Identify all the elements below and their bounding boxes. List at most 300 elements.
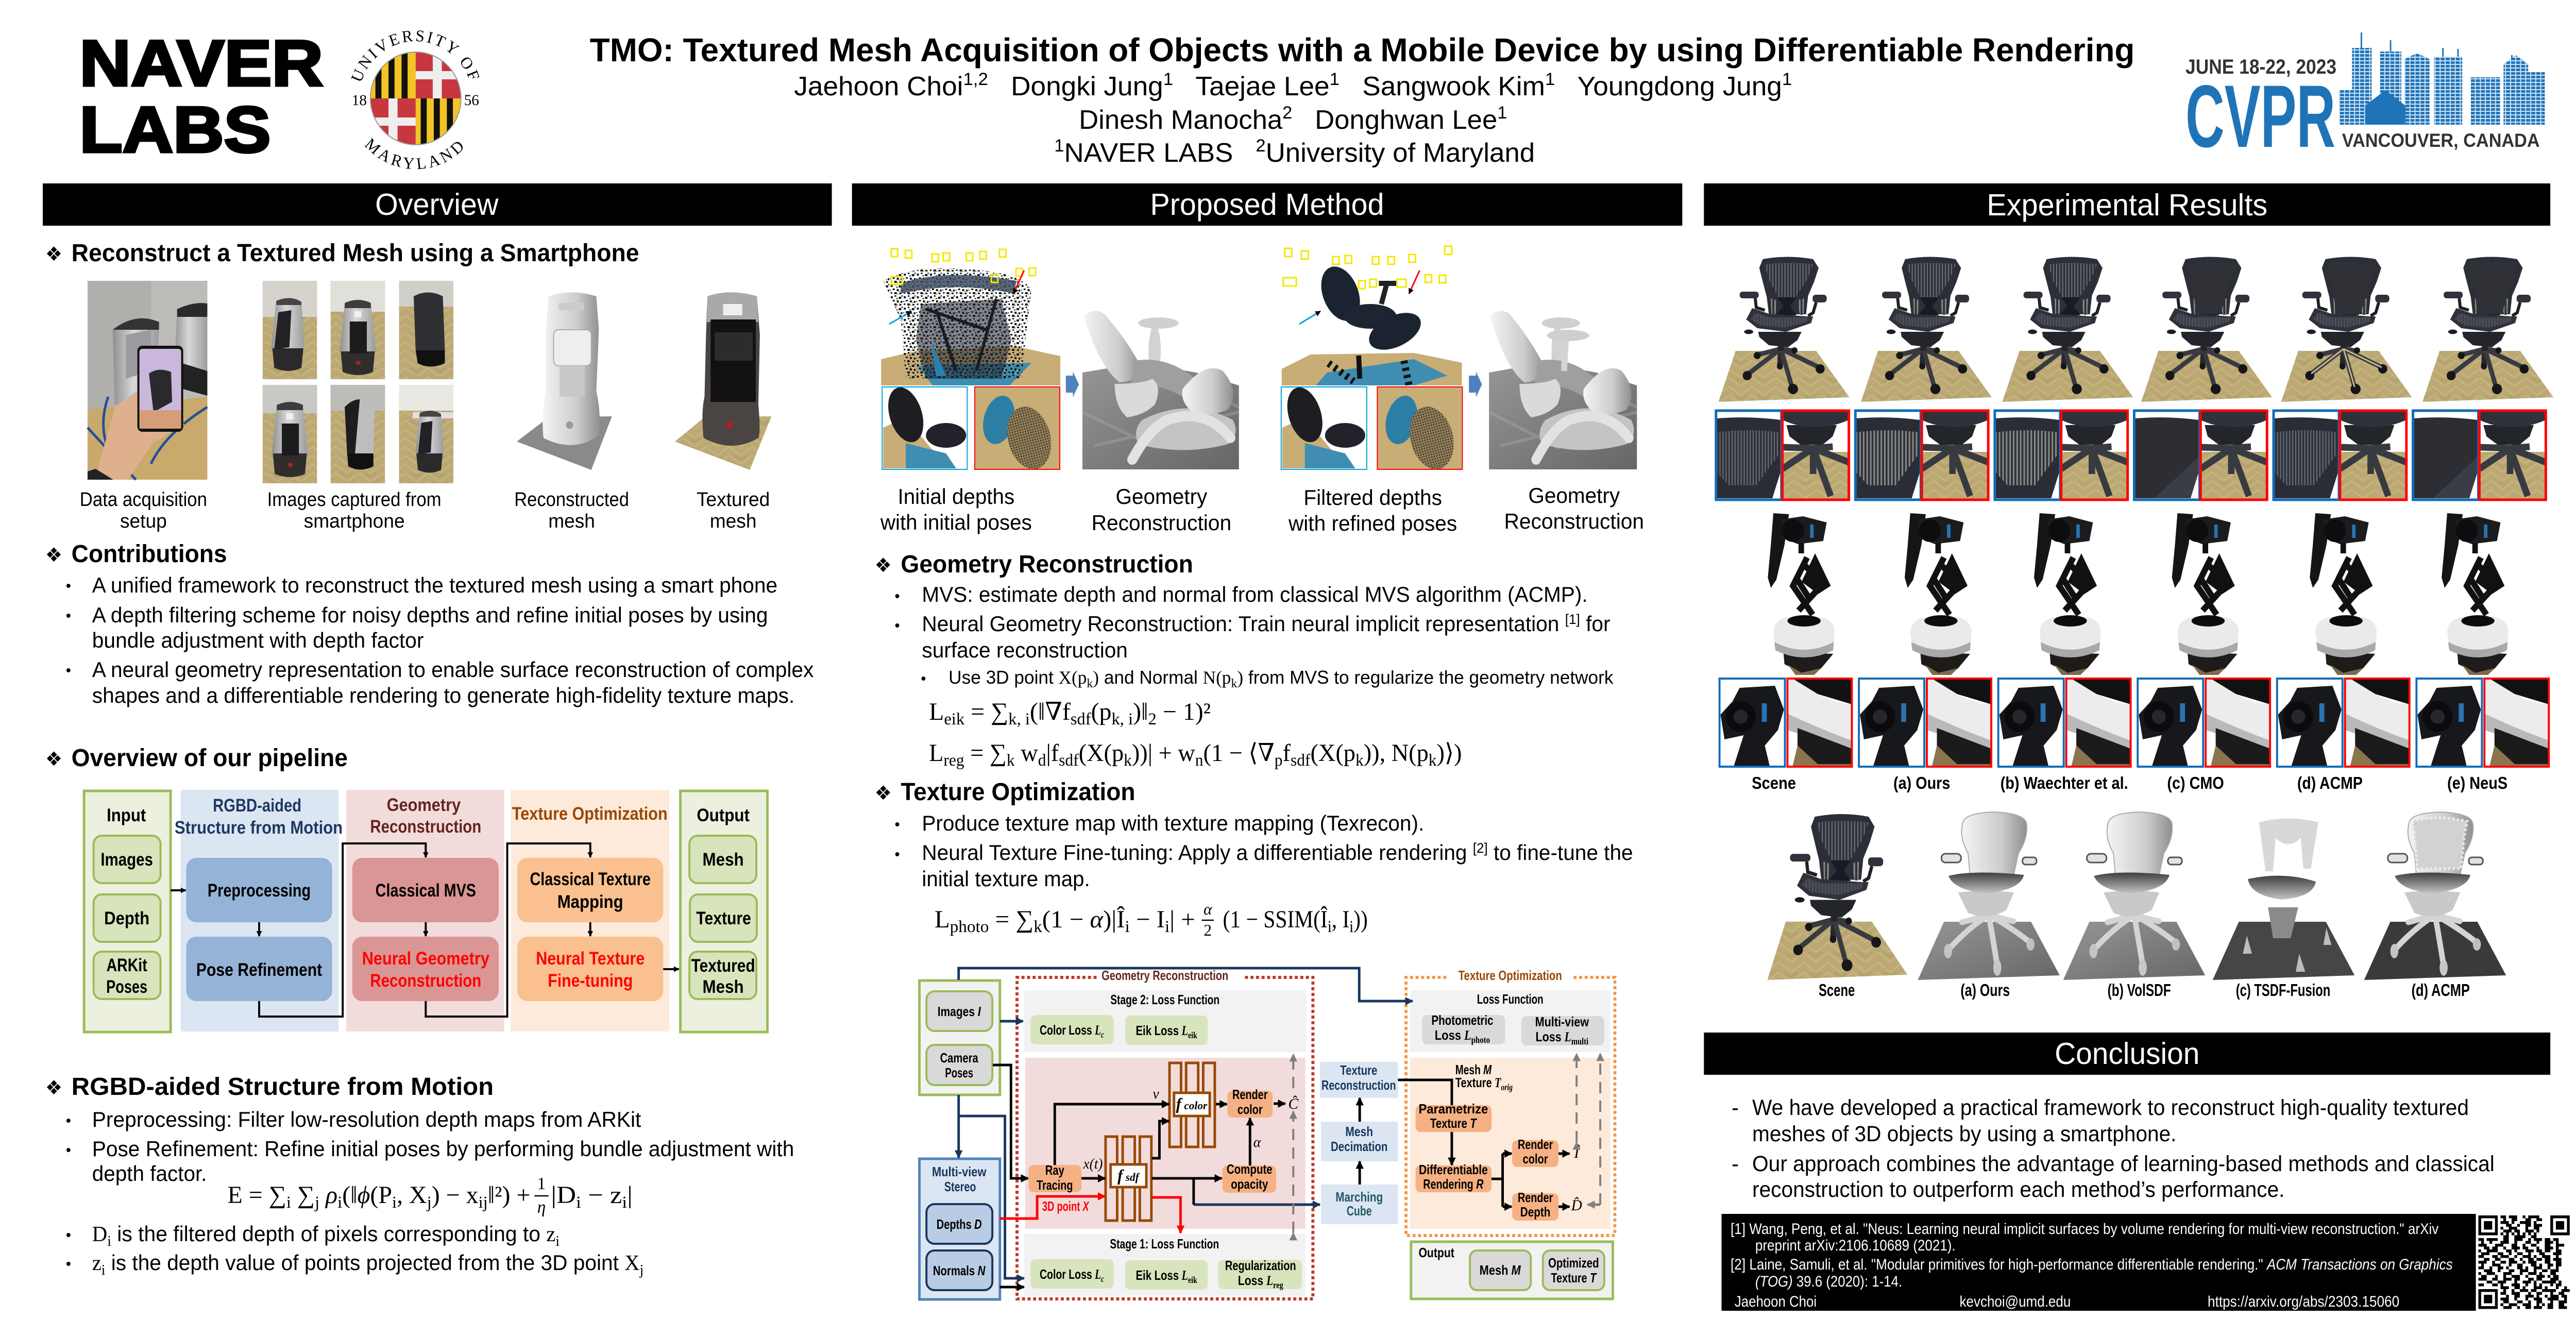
equation: regularization loss: (X(p (1079, 740, 1124, 767)
QR code (2479, 1215, 2570, 1309)
panel: texture optimization steps: Î (1573, 1144, 1580, 1161)
equation: regularization loss: )⟩) (1437, 740, 1462, 767)
equation: eikonal loss: L (929, 699, 944, 725)
header: Overview (43, 183, 832, 226)
row: textured chair comparison (1719, 257, 2553, 402)
panel: texture loss function: multi (1571, 1036, 1588, 1046)
equation: bundle adjustment energy: i (622, 1193, 627, 1211)
text block: geometry reconstruction list: MVS: estimate depth and normal from classical MVS algorithm (ACMP). (922, 582, 1588, 606)
logo: CVPR 2023 Vancouver: JUNE 18-22, 2023 (2185, 56, 2336, 78)
render: textured mesh (675, 293, 771, 470)
equation: eikonal loss: = ∑ (964, 699, 1008, 725)
header: Experimental Results (1704, 183, 2550, 226)
panel: multi-view stereo: Depths D (937, 1217, 982, 1232)
block: marching cube: Cube (1347, 1204, 1372, 1219)
panel: texture optimization steps: Mesh M (1455, 1063, 1492, 1077)
photo: data acquisition setup (88, 281, 207, 480)
panel: texture loss function: Multi-view (1535, 1015, 1589, 1029)
text block: RGBD-aided SfM list: Preprocessing: Filter low-resolution depth maps from ARKit (92, 1107, 641, 1131)
text block: texture optimization list: initial texture map. (922, 867, 1090, 891)
arrow: blue step 2 (1469, 371, 1482, 397)
equation: regularization loss: sdf (1291, 751, 1311, 769)
equation: eikonal loss: sdf (1071, 709, 1091, 728)
text block: texture optimization list: Produce texture map with texture mapping (Texrecon). (922, 811, 1424, 835)
panel: stage 2 loss: Eik Loss L (1136, 1023, 1190, 1038)
text block: geometry reconstruction list: k (1231, 677, 1238, 690)
panel: output: Mesh (703, 850, 744, 870)
equation: photometric loss: , I (1332, 906, 1349, 933)
equation: bundle adjustment energy: ‖²) + (488, 1182, 530, 1209)
authors: Donghwan Lee (1292, 104, 1497, 134)
authors: Taejae Lee (1173, 71, 1330, 101)
block: mesh decimation: Mesh (1345, 1125, 1373, 1139)
panel: stage 2 loss: c (1101, 1029, 1104, 1040)
image: initial depths point cloud (881, 249, 1060, 475)
text block: conclusion: reconstruction to outperform each method’s performance. (1752, 1178, 2284, 1202)
captions: proposed method images: with refined poses (1288, 511, 1457, 535)
block: marching cube: Marching (1335, 1190, 1383, 1205)
panel: Overview (43, 183, 832, 1278)
authors: 1 (1782, 70, 1792, 89)
authors: 1 (1054, 137, 1064, 156)
equation: regularization loss: sdf (1059, 751, 1079, 769)
authors: 1 (1330, 70, 1340, 89)
header: Experimental Results: Experimental Results (1987, 188, 2267, 222)
equation: photometric loss: i (1328, 917, 1332, 936)
captions: proposed method images: Geometry (1115, 484, 1207, 509)
row: geometry comparison chairs (1767, 812, 2506, 980)
block: texture reconstruction: Texture (1340, 1063, 1377, 1078)
equation: bundle adjustment energy: |D (551, 1182, 573, 1209)
equation: bundle adjustment energy: , X (397, 1182, 427, 1209)
equation: eikonal loss: eik (944, 709, 965, 728)
panel: output mesh and texture: Texture T (1551, 1271, 1597, 1286)
captions: overview images: Images captured from (267, 488, 442, 510)
panel: Proposed Method (852, 183, 1682, 1299)
equation: bundle adjustment energy: (‖ (342, 1182, 358, 1209)
panel: input: Images (100, 850, 153, 870)
authors (794, 70, 1792, 167)
panel: output: Mesh (703, 977, 744, 997)
equation: photometric loss: )) (1353, 906, 1368, 933)
panel: networks (1025, 1058, 1306, 1229)
row: robot arm comparison (1768, 513, 2509, 675)
heading: Geometry Reconstruction: ❖ (875, 554, 892, 577)
text block: conclusion: meshes of 3D objects by using a smartphone. (1752, 1122, 2176, 1146)
heading: Contributions: ❖ (45, 544, 62, 566)
panel: networks: opacity (1231, 1177, 1268, 1192)
panel: stage 1 loss: eik (1188, 1275, 1197, 1285)
text block: geometry reconstruction list: from MVS to regularize the geometry network (1248, 667, 1613, 688)
equation: photometric loss: (1 − SSIM(Î (1223, 906, 1341, 933)
panel: stage 1 loss: c (1101, 1274, 1104, 1284)
equation: regularization loss: k (1124, 751, 1132, 769)
equation: regularization loss: |f (1046, 740, 1059, 767)
equation: regularization loss: )), N(p (1364, 740, 1429, 767)
captions: overview images (80, 488, 770, 532)
text block: texture optimization list: [2] (1473, 840, 1488, 856)
panel: stage 1 loss: Loss L (1238, 1273, 1275, 1288)
equation: photometric loss: L (935, 906, 949, 933)
logo: University of Maryland seal: 56 (464, 92, 479, 109)
logo: NAVER LABS: LABS (79, 94, 270, 166)
heading: Geometry Reconstruction: Geometry Reconstruction (901, 551, 1193, 578)
authors: Dinesh Manocha (1079, 104, 1275, 134)
frame: texture optimization: Texture Optimization (1459, 969, 1562, 983)
authors: Sangwook Kim (1340, 71, 1545, 101)
heading: RGBD-aided Structure from Motion: RGBD-aided Structure from Motion (72, 1073, 494, 1101)
captions: proposed method images: Reconstruction (1092, 511, 1231, 535)
network: f color (1170, 1063, 1215, 1147)
panel: RGBD-aided structure from motion: Pose Refinement (196, 960, 323, 980)
labels: geometry comparison methods: (b) VolSDF (2108, 980, 2171, 1000)
equation: photometric loss: = ∑ (989, 906, 1033, 933)
heading: Reconstruct a Textured Mesh: ❖ (45, 243, 62, 265)
authors: 1,2 (963, 70, 988, 89)
text block: RGBD-aided SfM list: depth factor. (92, 1161, 207, 1186)
panel: texture optimization steps: D̂ (1571, 1197, 1582, 1214)
equation: bundle adjustment energy: j (427, 1193, 432, 1211)
authors: Dongki Jung (988, 71, 1163, 101)
equation: regularization loss: f (1283, 740, 1291, 767)
equation: bundle adjustment energy: ρ (319, 1182, 337, 1209)
captions: proposed method images: Reconstruction (1504, 509, 1644, 533)
text block: RGBD-aided SfM list: is the depth value of points projected from the 3D point (105, 1250, 624, 1275)
text block: RGBD-aided SfM list (66, 1107, 794, 1278)
panel: texture loss function (1410, 990, 1611, 1052)
equation: regularization loss: w (1015, 740, 1038, 767)
equation: bundle adjustment energy: i (337, 1193, 342, 1211)
text block: RGBD-aided SfM list: i (107, 1233, 111, 1249)
arrow: blue step 1 (1066, 371, 1079, 397)
panel: stage 2 loss (1024, 990, 1307, 1052)
labels: texture comparison methods: (c) CMO (2167, 773, 2224, 792)
equation: regularization loss: = ∑ (964, 740, 1007, 767)
authors: Youngdong Jung (1555, 71, 1782, 101)
labels: geometry comparison methods: (c) TSDF-Fusion (2236, 980, 2330, 1000)
authors: 2 (1282, 104, 1292, 123)
panel: networks: Ray (1045, 1163, 1064, 1178)
heading: Overview of our pipeline: ❖ (45, 748, 62, 770)
panel: texture optimization steps: Render (1518, 1138, 1553, 1152)
equation: eikonal loss: k, i (1008, 709, 1030, 728)
panel: output (681, 791, 768, 1032)
labels: texture comparison methods: (d) ACMP (2297, 773, 2363, 792)
equation: regularization loss: ))| + w (1132, 740, 1195, 767)
equation: eikonal loss: 2 (1148, 709, 1157, 728)
panel: output mesh and texture (1411, 1242, 1613, 1299)
panel: texture optimization (511, 790, 669, 1031)
panel: output mesh and texture: Output (1418, 1246, 1454, 1260)
panel: input: ARKit (107, 956, 147, 975)
authors: 1 (1163, 70, 1173, 89)
frame: geometry reconstruction (1017, 969, 1313, 1299)
captions: overview images: mesh (548, 510, 595, 532)
equation: regularization loss: L (929, 740, 944, 767)
panel: stage 1 loss: Color Loss L (1040, 1267, 1108, 1282)
panel: texture optimization steps: Texture T (1455, 1075, 1503, 1090)
text block: RGBD-aided SfM list: is the filtered depth of pixels corresponding to (111, 1222, 546, 1246)
equation: photometric loss: α)|Î (1090, 906, 1124, 933)
captions: overview images: Reconstructed (514, 488, 629, 510)
flowchart: pipeline overview (84, 790, 768, 1032)
panel: networks: Tracing (1037, 1178, 1073, 1193)
logo: CVPR 2023 Vancouver (2185, 32, 2545, 166)
panel: output mesh and texture: Optimized (1548, 1256, 1599, 1271)
text block: texture optimization list: to fine-tune the (1488, 840, 1633, 865)
row: chair detail crops (1716, 411, 2546, 500)
text block: geometry reconstruction list: [1] (1565, 612, 1580, 627)
panel: RGBD-aided structure from motion: Structure from Motion (175, 818, 343, 838)
labels: geometry comparison methods: Scene (1819, 980, 1855, 1000)
text block: RGBD-aided SfM list: D (92, 1222, 107, 1246)
logo: University of Maryland seal: UNIVERSITY OF (351, 30, 480, 81)
panel: texture optimization steps: orig (1501, 1082, 1513, 1092)
text block: geometry reconstruction list: Use 3D point X(p (948, 667, 1087, 688)
panel: texture optimization steps: Rendering R (1423, 1177, 1484, 1192)
panel: texture optimization: Texture Optimization (512, 804, 668, 824)
text block: contributions list: shapes and a differentiable rendering to generate high-fidelity texture maps. (92, 683, 794, 707)
equation: eikonal loss: (p (1091, 699, 1111, 725)
render: first geometry reconstruction (1082, 311, 1239, 469)
text block: contributions list: A depth filtering scheme for noisy depths and refine initial poses by using (92, 603, 768, 627)
captions: overview images: mesh (710, 510, 757, 532)
text block: contributions list (66, 573, 814, 707)
captions: overview images: smartphone (304, 510, 405, 532)
panel: texture optimization: Mapping (557, 892, 623, 912)
panel: input: Input (107, 806, 146, 825)
block: texture reconstruction: Reconstruction (1321, 1078, 1396, 1093)
text block: texture optimization list: Neural Texture Fine-tuning: Apply a differentiable rendering (922, 840, 1473, 865)
panel: RGBD-aided structure from motion: RGBD-aided (213, 796, 301, 816)
panel: references and contact: [1] Wang, Peng, et al. "Neus: Learning neural implicit surfaces by volume rendering for multi-view reconstruction." arXiv (1731, 1221, 2439, 1238)
text block: conclusion: - (1732, 1096, 1739, 1120)
authors: NAVER LABS (1064, 137, 1256, 167)
panel: texture optimization steps: Differentiable (1419, 1163, 1488, 1177)
equation: photometric loss: photo (950, 917, 989, 936)
panel: texture loss function: photo (1471, 1035, 1490, 1045)
panel: texture loss function: Photometric (1431, 1013, 1494, 1028)
equation: bundle adjustment energy: ∑ (291, 1182, 315, 1209)
text block: geometry reconstruction list: ) (1237, 667, 1243, 688)
equation: photometric loss: i (1165, 917, 1170, 936)
labels: geometry comparison methods: (a) Ours (1960, 980, 2010, 1000)
panel: RGBD-aided structure from motion: Preprocessing (208, 881, 311, 901)
row: robot arm detail crops (1720, 679, 2549, 767)
equation: bundle adjustment energy: 1 (537, 1174, 546, 1193)
authors: 1 (1545, 70, 1555, 89)
panel: texture loss function: Loss L (1536, 1029, 1572, 1044)
text block: geometry reconstruction list: and Normal N(p (1104, 667, 1231, 688)
heading: Reconstruct a Textured Mesh: Reconstruct a Textured Mesh using a Smartphone (72, 240, 639, 267)
panel: texture optimization: Fine-tuning (548, 971, 633, 991)
panel: texture optimization steps: Render (1518, 1191, 1553, 1205)
equation: eikonal loss: − 1)² (1157, 699, 1211, 725)
text block: geometry reconstruction list: Neural Geometry Reconstruction: Train neural implicit representation (922, 612, 1564, 636)
captions: proposed method images: Filtered depths (1303, 485, 1442, 510)
network: f sdf (1106, 1137, 1151, 1221)
panel: geometry reconstruction: Reconstruction (370, 971, 481, 991)
equation: bundle adjustment energy: j (314, 1193, 319, 1211)
panel: stage 1 loss: Eik Loss L (1136, 1268, 1190, 1283)
captions: proposed method images (880, 483, 1644, 535)
text block: RGBD-aided SfM list: z (546, 1222, 555, 1246)
text block: texture optimization list (895, 811, 1633, 891)
equation: eikonal loss: (‖∇f (1030, 699, 1071, 725)
logo: University of Maryland seal (351, 30, 480, 169)
panel: multi-view stereo: Normals N (933, 1264, 986, 1278)
equation: regularization loss: k (1429, 751, 1437, 769)
header: Overview: Overview (375, 188, 499, 222)
panel: references and contact: preprint arXiv:2106.10689 (2021). (1755, 1237, 1956, 1254)
authors: 2 (1256, 137, 1266, 156)
equation: photometric loss (935, 900, 1368, 939)
panel: texture loss function: Loss Function (1477, 992, 1544, 1007)
labels: geometry comparison methods (1819, 980, 2470, 1000)
equation: bundle adjustment energy: | (627, 1182, 633, 1209)
panel: geometry reconstruction: Geometry (387, 796, 461, 815)
title: TMO: Textured Mesh Acquisition of Objects with a Mobile Device by using Differentiable Rendering (590, 32, 2134, 69)
logo: CVPR 2023 Vancouver: CVPR (2185, 67, 2335, 166)
equation: regularization loss: (X(p (1311, 740, 1355, 767)
text block: contributions list: A unified framework to reconstruct the textured mesh using a smart phone (92, 573, 777, 597)
panel: Experimental Results (1704, 183, 2570, 1311)
panel: input: Depth (104, 909, 149, 928)
text block: RGBD-aided SfM list: X (624, 1251, 640, 1275)
panel: references and contact: Jaehoon Choi (1735, 1293, 1817, 1310)
text block: conclusion (1732, 1096, 2495, 1202)
authors: 1 (1497, 104, 1507, 123)
panel: geometry reconstruction (346, 790, 504, 1031)
equation: bundle adjustment energy: ϕ(P (358, 1182, 392, 1209)
equation: bundle adjustment energy: ij (479, 1193, 488, 1211)
text block: RGBD-aided SfM list: i (101, 1262, 106, 1278)
equation: regularization loss: reg (943, 751, 964, 769)
equation: regularization loss: p (1275, 751, 1283, 769)
text block: conclusion: We have developed a practical framework to reconstruct high-quality textured (1752, 1096, 2469, 1120)
logo: University of Maryland seal: MARYLAND (364, 138, 463, 169)
authors: Jaehoon Choi (794, 71, 956, 101)
header: Conclusion: Conclusion (2055, 1037, 2199, 1071)
panel: RGBD-aided structure from motion (175, 790, 343, 1031)
panel: networks: x(t) (1083, 1156, 1103, 1172)
panel: output: Output (697, 806, 750, 825)
panel: input images and poses (920, 980, 1000, 1095)
frame: texture optimization (1406, 969, 1615, 1236)
panel: networks: color (1238, 1103, 1263, 1117)
panel: networks: Ĉ (1288, 1095, 1299, 1112)
logo: CVPR 2023 Vancouver: VANCOUVER, CANADA (2342, 130, 2540, 151)
panel: multi-view stereo: Stereo (944, 1180, 976, 1194)
text block: RGBD-aided SfM list: Pose Refinement: Refine initial poses by performing bundle adjustment with (92, 1137, 794, 1161)
image grid: images captured from smartphone (263, 281, 453, 483)
equation: photometric loss: − I (1130, 906, 1165, 933)
panel: stage 2 loss: Stage 2: Loss Function (1110, 993, 1219, 1007)
text block: RGBD-aided SfM list: z (92, 1251, 101, 1275)
heading: Contributions: Contributions (72, 540, 227, 568)
panel: multi-view stereo (920, 1159, 1000, 1299)
text block: conclusion: - (1732, 1152, 1739, 1176)
equation: photometric loss: | + (1170, 906, 1195, 933)
equation: bundle adjustment energy: − z (581, 1182, 622, 1209)
panel: output mesh and texture: Mesh M (1480, 1263, 1521, 1278)
text block: geometry reconstruction list: for (1580, 612, 1611, 636)
equation: regularization loss: (1 − ⟨∇ (1204, 740, 1275, 767)
authors: University of Maryland (1266, 137, 1535, 167)
equation: photometric loss: 2 (1204, 921, 1212, 939)
frame: geometry reconstruction: Geometry Reconstruction (1101, 969, 1228, 983)
panel: input images and poses: Poses (945, 1066, 973, 1080)
panel: networks: Render (1232, 1088, 1267, 1102)
panel: texture loss function: Loss L (1435, 1028, 1472, 1043)
panel: output: Texture (696, 909, 751, 928)
captions: overview images: Textured (697, 488, 770, 510)
captions: proposed method images: Initial depths (898, 484, 1014, 509)
panel: stage 1 loss (1024, 1234, 1306, 1296)
header: Conclusion (1704, 1033, 2550, 1075)
text block: geometry reconstruction list: ) (1093, 667, 1099, 688)
network: f sdf: f sdf (1117, 1166, 1140, 1185)
panel: texture optimization steps: Parametrize (1418, 1102, 1488, 1117)
equation: bundle adjustment energy: η (537, 1198, 546, 1217)
panel: texture optimization: Classical Texture (530, 870, 651, 889)
panel: output: Textured (691, 956, 755, 976)
panel: input images and poses: Camera (940, 1051, 978, 1066)
panel: networks: α (1253, 1134, 1261, 1150)
panel: input images and poses: Images I (938, 1005, 981, 1019)
equation: photometric loss: α (1204, 900, 1213, 918)
text block: RGBD-aided SfM list: j (639, 1262, 643, 1278)
equation: bundle adjustment energy: ) − x (432, 1182, 479, 1209)
panel: references and contact (1721, 1214, 2476, 1311)
arrows: architecture connections (959, 968, 1600, 1287)
panel: geometry reconstruction: Reconstruction (370, 817, 481, 837)
captions: overview images: Data acquisition (80, 488, 207, 510)
panel: input: Poses (106, 977, 147, 997)
block: mesh decimation: Decimation (1331, 1140, 1387, 1154)
panel: networks: Compute (1227, 1162, 1273, 1177)
text block: geometry reconstruction list (895, 582, 1614, 690)
panel: networks: v (1153, 1086, 1159, 1102)
labels: texture comparison methods: (a) Ours (1893, 773, 1950, 792)
labels: texture comparison methods: Scene (1752, 773, 1796, 792)
heading: RGBD-aided Structure from Motion: ❖ (45, 1076, 62, 1099)
block: mesh decimation (1321, 1122, 1398, 1161)
panel: multi-view stereo: Multi-view (932, 1165, 987, 1179)
heading: Texture Optimization: Texture Optimization (901, 779, 1136, 806)
equation: bundle adjustment energy: i (392, 1193, 397, 1211)
panel: stage 1 loss: Regularization (1225, 1259, 1296, 1273)
arrows: pipeline connections (171, 843, 679, 1017)
text block: contributions list: bundle adjustment with depth factor (92, 628, 424, 652)
panel: stage 1 loss: reg (1273, 1280, 1283, 1290)
equation: regularization loss: k (1355, 751, 1364, 769)
captions: overview images: setup (120, 510, 167, 532)
render: second geometry reconstruction (1489, 311, 1637, 469)
equation: eikonal loss: k, i (1111, 709, 1133, 728)
labels: texture comparison methods: (b) Waechter et al. (2001, 773, 2128, 792)
diagram: TMO architecture (920, 968, 1615, 1299)
equation: bundle adjustment energy: E = ∑ (227, 1182, 285, 1209)
panel: stage 2 loss: eik (1188, 1030, 1197, 1040)
equation: bundle adjustment energy: i (286, 1193, 291, 1211)
panel: geometry reconstruction: Classical MVS (376, 881, 476, 901)
block: texture reconstruction (1320, 1062, 1398, 1098)
equation: photometric loss: i (1349, 917, 1353, 936)
equation: bundle adjustment energy: i (576, 1193, 581, 1211)
heading: Texture Optimization: ❖ (875, 782, 892, 804)
image: filtered depths point cloud (1281, 246, 1462, 475)
